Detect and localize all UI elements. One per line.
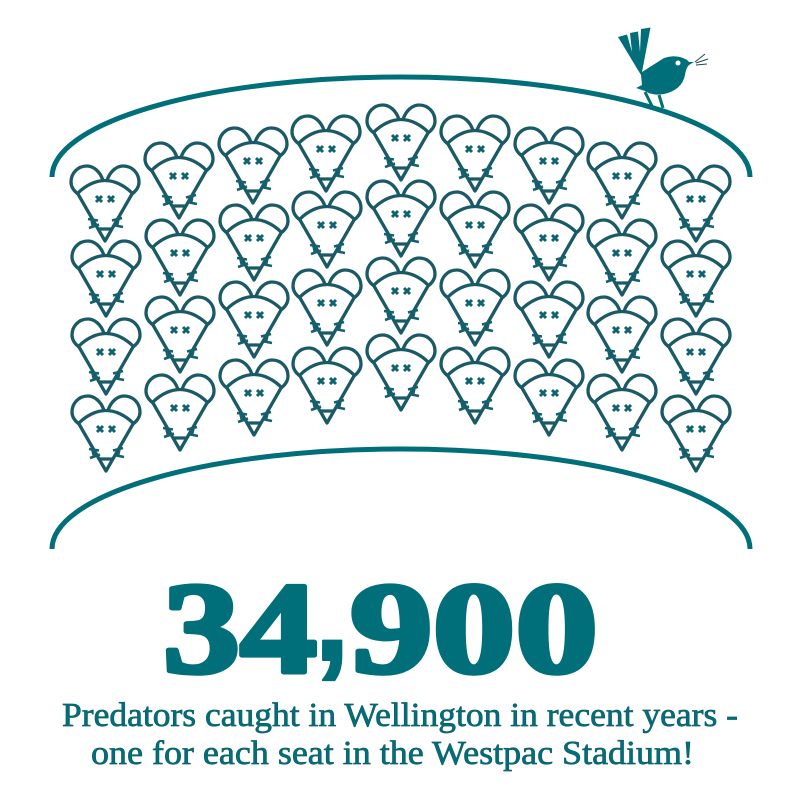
mice column 3 [219,128,288,435]
stadium top arc [52,77,750,177]
mice grid: 36 predators [71,105,730,471]
icon: fantail bird [618,28,708,108]
headline number [163,542,598,701]
mice column 7 [515,128,583,435]
headline number: 900 [350,557,598,701]
headline number: 34 [163,557,317,701]
caption line 2: one for each seat in the Westpac Stadium! [91,735,694,772]
mice column 6 [441,116,509,423]
caption line 1: Predators caught in Wellington in recent years - [62,697,738,734]
mice column 1 [71,166,140,471]
mice column 8 [588,143,656,450]
mice column 9 [662,166,730,471]
mice column 4 [292,116,361,423]
headline number: , [314,542,350,688]
mice column 5 [367,105,435,410]
mice column 2 [145,143,214,450]
stadium bottom arc [52,449,750,549]
